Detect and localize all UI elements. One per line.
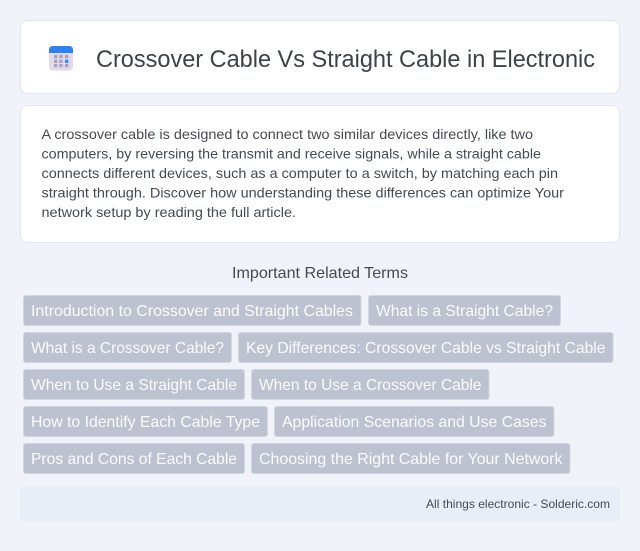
chip: introduction <box>24 296 361 326</box>
chip: when crossover <box>252 370 489 400</box>
chip: key differences <box>238 332 613 362</box>
chip: identify <box>24 406 268 436</box>
title: Crossover Cable Vs Straight Cable in Electronic <box>96 46 595 73</box>
chip: what is straight <box>368 296 560 326</box>
chip: application scenarios <box>274 406 554 436</box>
chip: when straight <box>24 370 244 400</box>
chip: introduction: Introduction to Crossover and Straight Cables <box>31 303 353 320</box>
text block: description <box>42 126 564 220</box>
chip: pros and cons: Pros and Cons of Each Cable <box>31 451 237 468</box>
chip: pros and cons <box>24 444 244 474</box>
footer <box>20 487 620 521</box>
text block: description: computers, by reversing the transmit and receive signals, while a straight cable <box>42 146 541 162</box>
panel: term chips <box>24 296 613 474</box>
icon: calendar <box>49 46 73 70</box>
chip: when crossover: When to Use a Crossover Cable <box>259 377 482 394</box>
chip: what is crossover <box>24 332 232 362</box>
chip: choosing <box>252 444 570 474</box>
text block: description: connects different devices, such as a computer to a switch, by matching each pin <box>42 165 558 181</box>
text block: description: straight through. Discover how understanding these differences can optimize Your <box>42 184 564 200</box>
text block: description: A crossover cable is designed to connect two similar devices directly, like two <box>42 126 533 142</box>
chip: application scenarios: Application Scenarios and Use Cases <box>282 414 546 431</box>
footer: All things electronic - Solderic.com <box>426 497 610 511</box>
chip: key differences: Key Differences: Crossover Cable vs Straight Cable <box>246 340 606 357</box>
chip: what is crossover: What is a Crossover Cable? <box>31 340 224 357</box>
chip: what is straight: What is a Straight Cable? <box>376 303 553 320</box>
heading: related terms: Important Related Terms <box>232 265 408 282</box>
chip: choosing: Choosing the Right Cable for Your Network <box>259 451 563 468</box>
panel: description <box>20 106 620 242</box>
chip: when straight: When to Use a Straight Cable <box>31 377 237 394</box>
panel: title card <box>20 20 620 94</box>
text block: description: network setup by reading the full article. <box>42 204 296 220</box>
chip: identify: How to Identify Each Cable Type <box>31 414 260 431</box>
